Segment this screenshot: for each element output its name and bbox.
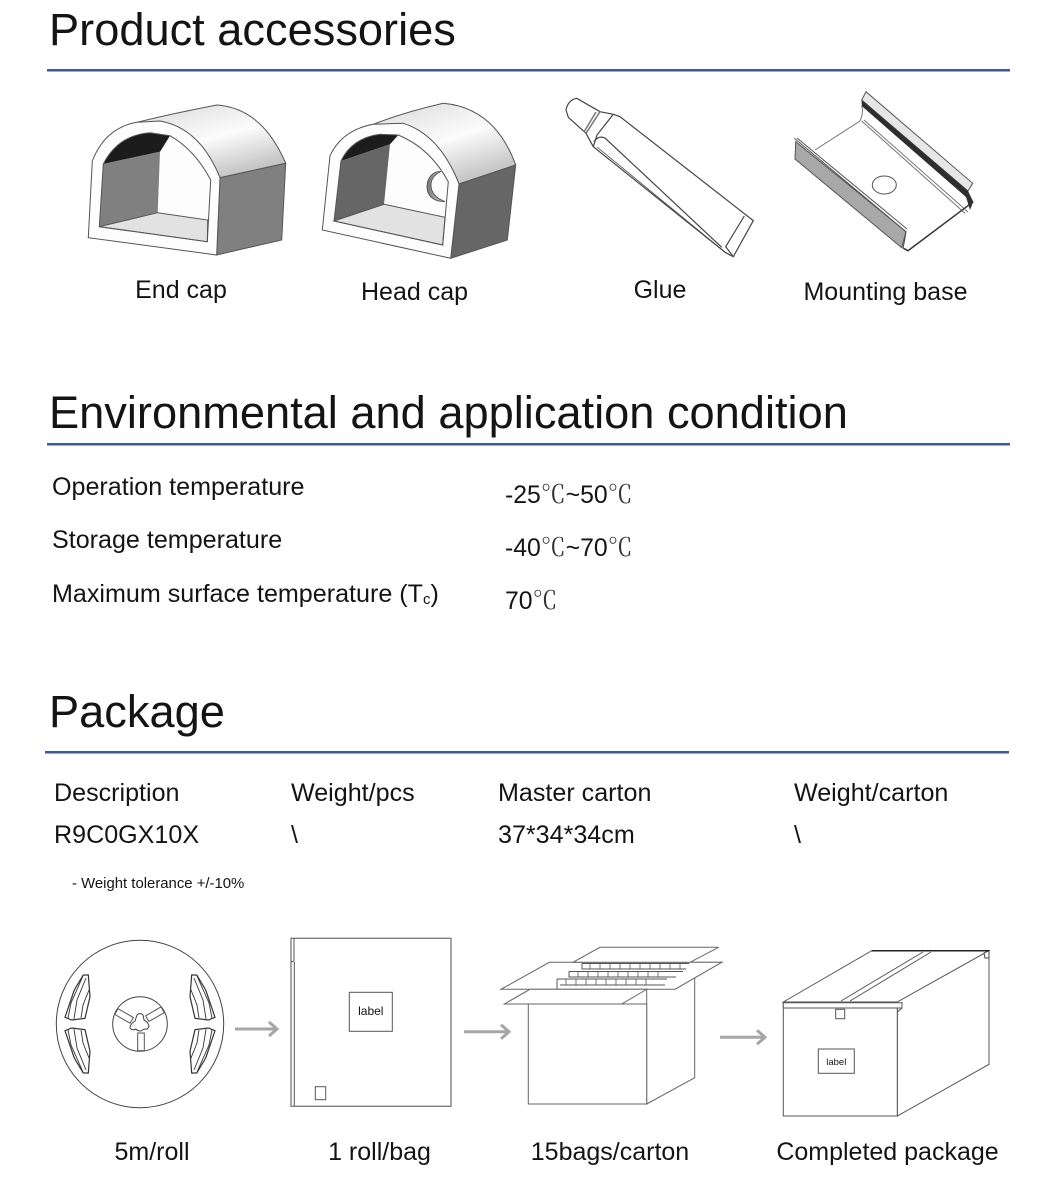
table: package specifications: Weight/carton: [794, 779, 948, 807]
row: maximum surface temperature: [52, 580, 557, 617]
arrow: bag to carton: [464, 1025, 509, 1039]
row: storage temperature: Storage temperature: [52, 526, 282, 554]
label: mounting base: Mounting base: [803, 278, 968, 306]
icon: bag: [291, 938, 451, 1106]
note: weight tolerance: - Weight tolerance +/-10%: [72, 876, 244, 892]
row: operation temperature: [52, 473, 633, 511]
table: package specifications: Master carton: [498, 779, 651, 807]
heading: package: Package: [49, 686, 225, 737]
icon: open carton: [501, 947, 722, 1104]
label: 15bags/carton: 15bags/carton: [531, 1138, 689, 1166]
icon: head cap: [322, 103, 516, 258]
table: package specifications: [54, 779, 948, 849]
icon: reel: [56, 940, 224, 1108]
row: storage temperature: [52, 526, 633, 564]
arrow: carton to completed package: [720, 1030, 765, 1044]
label: end cap: End cap: [135, 276, 227, 304]
table: package specifications: 37*34*34cm: [498, 821, 635, 849]
heading: environmental and application condition: Environmental and application condition: [49, 387, 848, 438]
row: maximum surface temperature: Maximum surface temperature (T: [52, 580, 423, 608]
heading: product accessories: Product accessories: [49, 4, 456, 55]
label: 5m/roll: 5m/roll: [114, 1138, 190, 1166]
table: package specifications: Description: [54, 779, 180, 807]
table: package specifications: \: [794, 821, 801, 849]
bag label: label: [358, 1004, 383, 1018]
row: storage temperature: -40℃~70℃: [505, 528, 633, 564]
label: completed package: Completed package: [776, 1138, 999, 1166]
icon: glue tube: [566, 98, 753, 257]
table: package specifications: \: [291, 821, 298, 849]
table: package specifications: Weight/pcs: [291, 779, 415, 807]
carton label: label: [826, 1057, 846, 1068]
row: maximum surface temperature: c: [423, 591, 431, 608]
row: maximum surface temperature: ): [430, 580, 439, 608]
icon: end cap: [88, 105, 286, 255]
row: operation temperature: Operation temperature: [52, 473, 304, 501]
table: package specifications: R9C0GX10X: [54, 821, 199, 849]
icon: mounting base: [794, 92, 973, 251]
label: head cap: Head cap: [361, 278, 468, 306]
carton label: [818, 1049, 854, 1073]
icon: completed package: [783, 951, 989, 1116]
arrow: reel to bag: [235, 1022, 277, 1036]
label: 1 roll/bag: 1 roll/bag: [328, 1138, 431, 1166]
label: glue: Glue: [634, 276, 686, 304]
row: operation temperature: -25℃~50℃: [505, 475, 633, 511]
bag label: [349, 992, 392, 1031]
row: maximum surface temperature: 70℃: [505, 581, 557, 617]
